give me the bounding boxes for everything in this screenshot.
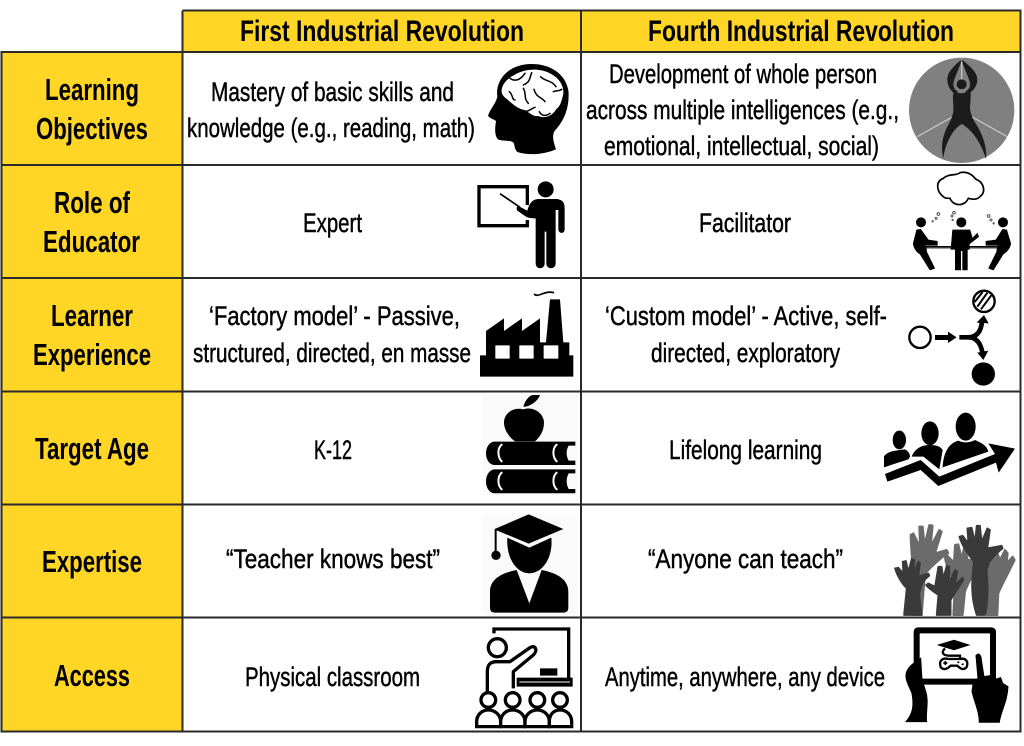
row label: Expertise: Expertise [42, 544, 142, 579]
row label: Role of Educator: Educator [43, 224, 140, 259]
icon: raised hands [895, 525, 1015, 615]
icon: classroom with teacher [477, 629, 573, 727]
row label: Learning Objectives: Objectives [36, 111, 148, 146]
icon: graduate with cap [483, 514, 578, 614]
icon: hands holding tablet [906, 630, 1008, 722]
text: custom model [605, 301, 887, 368]
text: factory model: ‘Factory model’ - Passive, [209, 301, 460, 331]
text: Teacher knows best: “Teacher knows best” [226, 544, 440, 574]
text: fourth revolution objectives [586, 59, 899, 161]
icon: factory [480, 292, 573, 377]
icon: cap and game controller [940, 641, 967, 669]
text: custom model: directed, exploratory [651, 338, 840, 368]
text: factory model [193, 301, 471, 368]
text: custom model: ‘Custom model’ - Active, self- [605, 301, 887, 331]
text: fourth revolution objectives: Development of whole person [609, 59, 877, 89]
text: Anytime, anywhere, any device: Anytime, anywhere, any device [605, 662, 885, 692]
row label: Role of Educator: Role of [54, 185, 130, 220]
row label: Learner Experience [33, 298, 151, 372]
text: fourth revolution objectives: emotional, intellectual, social) [604, 131, 879, 161]
text: Physical classroom: Physical classroom [245, 662, 420, 692]
text: Anyone can teach: “Anyone can teach” [648, 544, 843, 574]
text: Expert: Expert [303, 208, 362, 238]
icon: people on rising arrow [884, 413, 1015, 486]
row label: Learner Experience: Learner [51, 298, 133, 333]
icon: multiple intelligences figure [909, 58, 1014, 163]
row label: Learning Objectives [36, 72, 148, 146]
text: first revolution objectives: knowledge (e.g., reading, math) [187, 113, 475, 143]
row label: Learner Experience: Experience [33, 337, 151, 372]
text: Lifelong learning: Lifelong learning [669, 435, 822, 465]
text: fourth revolution objectives: across multiple intelligences (e.g., [586, 95, 899, 125]
icon: branching path [909, 291, 995, 386]
icon: teacher at board [479, 181, 565, 268]
icon: head with brain [488, 64, 569, 154]
row label: Target Age: Target Age [35, 431, 149, 466]
text: Facilitator: Facilitator [699, 208, 791, 238]
row label: Learning Objectives: Learning [45, 72, 139, 107]
icon: books with apple [483, 395, 578, 495]
icon: group thinking at a table [913, 172, 1011, 270]
row label: Role of Educator [43, 185, 140, 259]
text: first revolution objectives: Mastery of basic skills and [211, 77, 454, 107]
text: first revolution objectives [187, 77, 475, 143]
row label: Access: Access [54, 658, 130, 693]
text: factory model: structured, directed, en masse [193, 338, 471, 368]
text: K-12: K-12 [314, 435, 352, 465]
heading: First Industrial Revolution: First Industrial Revolution [240, 15, 524, 48]
